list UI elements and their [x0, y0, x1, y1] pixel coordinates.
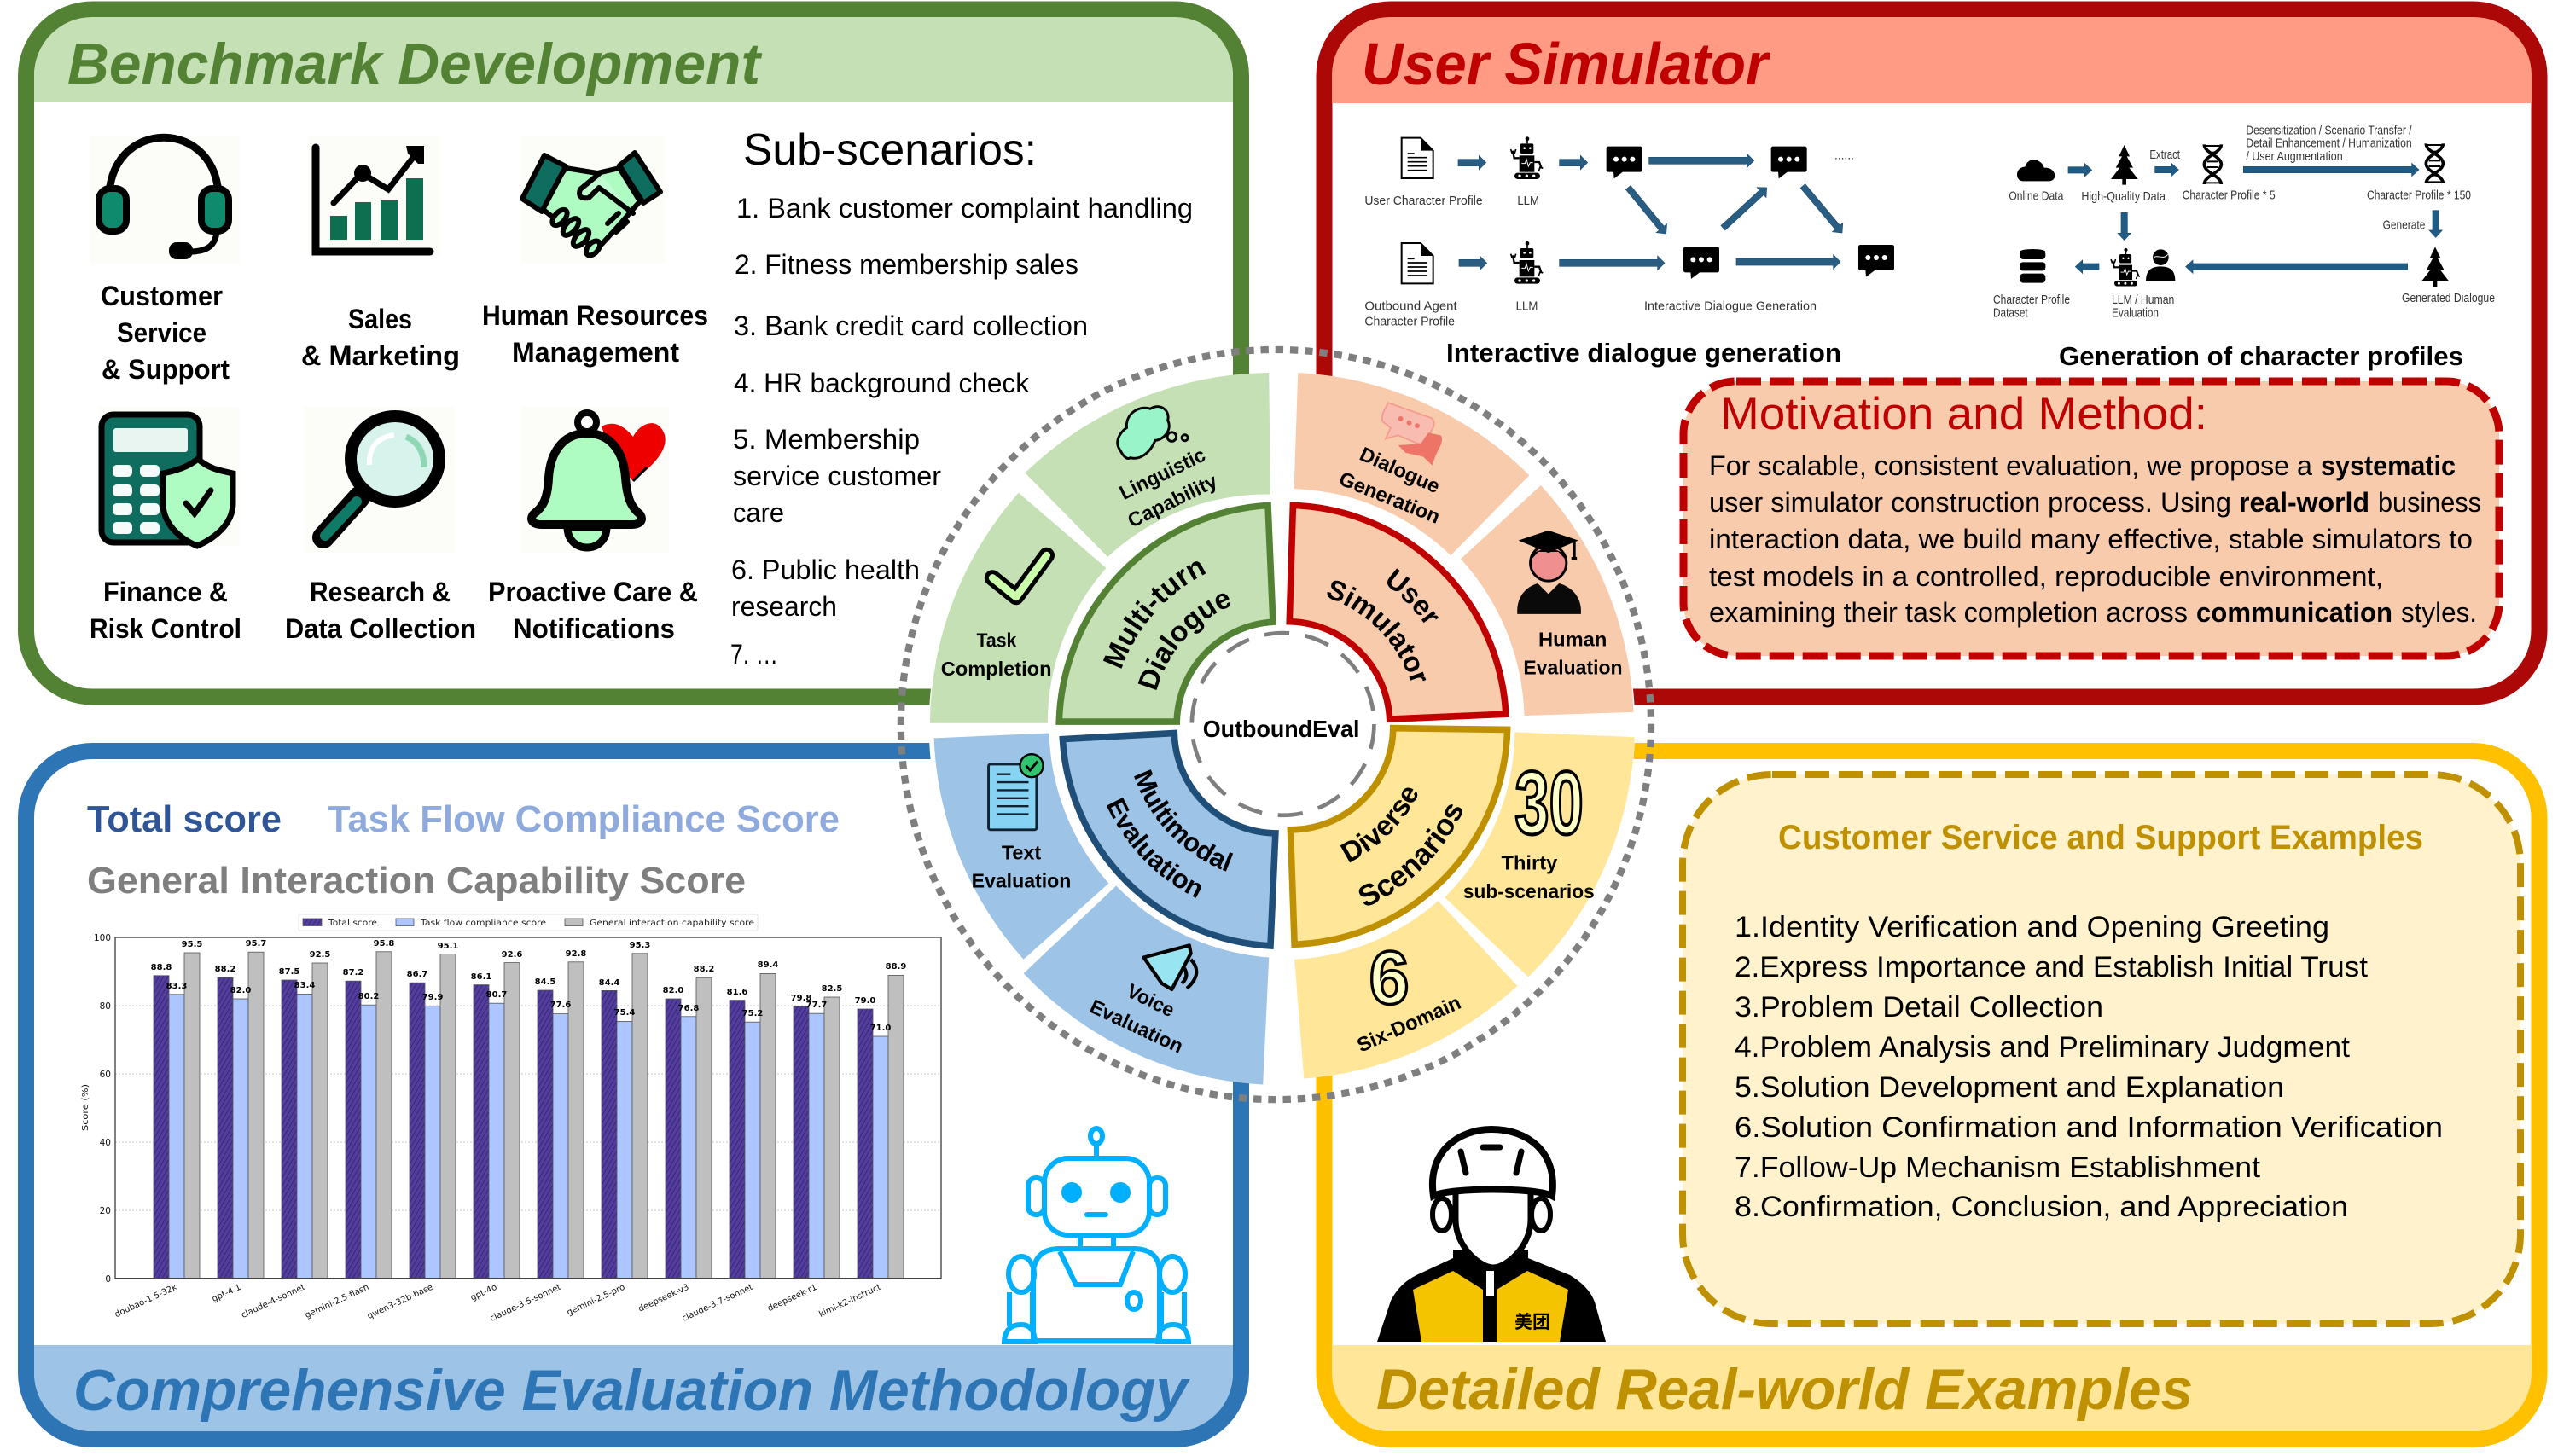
label: proactive care and notifications: Proactive Care & [488, 577, 698, 607]
diagram labels: Generate [2383, 219, 2425, 233]
label [941, 629, 1052, 680]
icon: generated tree [2421, 247, 2449, 287]
panel: benchmark development [26, 9, 1241, 697]
label: Six-Domain [1353, 991, 1464, 1057]
number 6: 6 [1369, 935, 1410, 1019]
bars and value labels by model: 80.7 [486, 990, 507, 1000]
sector: diverse scenarios [1287, 725, 1510, 948]
panel: user simulator [1324, 9, 2539, 697]
x axis model names: gemini-2.5-flash [304, 1283, 370, 1320]
icon: bell with heart [532, 413, 666, 548]
outer dotted ring [901, 350, 1651, 1099]
panel: comprehensive evaluation methodology [26, 751, 1241, 1440]
motivation body text: real-world [2239, 487, 2369, 518]
label: Completion [941, 658, 1052, 680]
bars and value labels by model: 95.3 [630, 941, 650, 950]
examples list: 2.Express Importance and Establish Initial Trust [1735, 951, 2369, 983]
x axis model names: gpt-4.1 [211, 1283, 242, 1304]
x axis model names [113, 1283, 882, 1324]
wedge: text evaluation [934, 734, 1108, 960]
label: finance and risk control: Finance & [103, 577, 228, 607]
motivation body text: user simulator construction process. Using [1709, 487, 2231, 518]
bar chart [81, 914, 941, 1324]
examples list: 1.Identity Verification and Opening Greeting [1735, 911, 2329, 943]
examples list: 6.Solution Confirmation and Information Verification [1735, 1111, 2443, 1144]
bars and value labels by model: 95.7 [246, 939, 266, 948]
diagram labels: Dataset [1993, 306, 2028, 320]
label: human resources management [482, 300, 708, 368]
icon: human evaluator [2146, 249, 2175, 281]
examples heading: Customer Service and Support Examples [1778, 819, 2423, 856]
bars and value labels by model: 75.4 [614, 1008, 635, 1018]
arrows: dialogue flow [1458, 154, 1847, 270]
chart legend: General interaction capability score [590, 919, 754, 928]
callout: motivation and method [1683, 381, 2499, 656]
heading: detailed real-world examples: Detailed Real-world Examples [1376, 1357, 2193, 1422]
icon: dna expanded [2426, 143, 2443, 183]
icon: speech bubbles [1382, 403, 1442, 466]
diagram labels: Character Profile * 5 [2183, 189, 2276, 203]
wedge: dialogue generation [1294, 373, 1529, 555]
icon: agent profile document [1402, 243, 1433, 283]
label: sales and marketing: Sales [348, 304, 412, 334]
label: finance and risk control [90, 577, 241, 644]
label: sales and marketing [301, 304, 460, 371]
y axis ticks: 0 [105, 1274, 111, 1285]
chart title: total score: Total score [87, 798, 282, 840]
bars and value labels by model: 81.6 [727, 988, 747, 997]
label: customer service and support: & Support [102, 354, 230, 385]
sub-scenarios list: 3. Bank credit card collection [734, 310, 1088, 341]
diagram labels: Character Profile [1993, 293, 2070, 307]
bars and value labels by model: 92.6 [502, 950, 522, 960]
chart title: task flow compliance score: Task Flow Compliance Score [328, 798, 840, 840]
label: Evaluation [972, 869, 1071, 891]
label: research and data collection [285, 577, 476, 644]
y axis ticks [94, 933, 111, 1285]
evaluation footer band [34, 1345, 1233, 1431]
heading: benchmark development: Benchmark Development [67, 32, 762, 96]
motivation heading: Motivation and Method: [1720, 389, 2207, 439]
wedge: six-domain [1294, 901, 1517, 1078]
label: Evaluation [1523, 656, 1623, 678]
sub-scenarios list [730, 125, 1193, 670]
icon: LLM robot lower [1511, 241, 1543, 284]
diagram labels: LLM [1516, 299, 1538, 313]
sub-scenarios list: 5. Membership [733, 424, 920, 455]
bars and value labels by model: 84.4 [599, 978, 619, 988]
x axis model names: gemini-2.5-pro [566, 1283, 626, 1318]
label: Task [976, 629, 1017, 652]
bars and value labels by model: 83.4 [294, 981, 315, 990]
diagram labels: LLM / Human [2112, 293, 2174, 307]
y axis ticks: 20 [100, 1206, 111, 1216]
label: Linguistic [1116, 444, 1209, 504]
benchmark header band [34, 17, 1233, 102]
icon: chat bubble three [1683, 247, 1719, 279]
label: Evaluation [1086, 995, 1187, 1058]
diagram labels: User Character Profile [1364, 194, 1483, 208]
icon: magnifier [323, 416, 439, 537]
bars and value labels by model: 77.6 [550, 1001, 571, 1010]
icon: LLM evaluator robot [2111, 248, 2140, 287]
x axis model names: claude-3.7-sonnet [681, 1283, 754, 1324]
label: Dialogue [1357, 443, 1444, 497]
label: human resources management: Management [512, 337, 679, 368]
icon: check mark [992, 555, 1047, 597]
bars and value labels by model: 87.5 [279, 967, 299, 977]
bars and value labels by model: 75.2 [742, 1009, 763, 1018]
label: customer service and support [101, 281, 230, 385]
logo text: 美团 [1514, 1313, 1550, 1332]
label: human resources management: Human Resources [482, 300, 708, 331]
label: Diverse [1340, 788, 1418, 863]
bars and value labels by model: 77.7 [806, 1001, 827, 1010]
chart legend [299, 914, 758, 931]
icon: chat bubble two [1771, 147, 1807, 178]
sub-scenarios list: 6. Public health [731, 554, 920, 585]
x axis model names: gpt-4o [469, 1283, 498, 1303]
ellipsis: ...... [1834, 149, 1854, 162]
examples list [1735, 911, 2443, 1223]
label: finance and risk control: Risk Control [90, 613, 241, 644]
bars and value labels by model: 86.1 [471, 972, 491, 982]
icon: handshake [522, 153, 660, 258]
diagram labels: / User Augmentation [2246, 150, 2343, 164]
diagram labels: High-Quality Data [2081, 190, 2166, 204]
motivation body text: systematic [2321, 450, 2456, 481]
y axis ticks: 80 [100, 1001, 111, 1012]
bars and value labels by model: 79.0 [855, 996, 875, 1006]
bars and value labels by model: 79.8 [791, 994, 811, 1003]
examples list: 4.Problem Analysis and Preliminary Judgment [1735, 1031, 2351, 1064]
sub-scenarios list: 7. … [730, 639, 778, 670]
label: research and data collection: Data Collection [285, 613, 476, 644]
icon: speaker [1143, 945, 1196, 989]
label: Multimodal [1134, 769, 1234, 872]
label: Text [1002, 841, 1041, 863]
icon: calculator and shield [102, 415, 233, 546]
motivation body text: test models in a controlled, reproducible environment, [1709, 561, 2383, 592]
motivation body text: communication [2196, 597, 2392, 628]
number 30: 30 [1514, 753, 1584, 853]
bars and value labels by model: 87.2 [343, 968, 363, 977]
label [972, 841, 1071, 891]
panel: detailed real-world examples [1324, 751, 2539, 1440]
label: scenarios arc: Scenarios [1358, 804, 1462, 906]
icon: dna [2204, 144, 2221, 184]
diagram labels: Outbound Agent [1364, 299, 1457, 313]
bars and value labels by model: 88.2 [215, 965, 235, 974]
center label: OutboundEval: OutboundEval [1203, 716, 1359, 742]
icon: database [2020, 249, 2045, 283]
label: Voice [1124, 979, 1178, 1021]
diagram labels: Extract [2149, 148, 2180, 162]
diagram labels: Desensitization / Scenario Transfer / [2246, 124, 2412, 137]
label: Thirty [1502, 852, 1557, 874]
heading: user simulator: User Simulator [1362, 31, 1771, 97]
sub-scenarios list: 1. Bank customer complaint handling [736, 193, 1193, 223]
caption: generation of character profiles: Generation of character profiles [2059, 341, 2463, 371]
label: dialogue arc: Dialogue [1138, 594, 1230, 690]
wedge: linguistic capability [1025, 373, 1270, 557]
x axis model names: deepseek-r1 [766, 1283, 818, 1314]
sub-scenarios list: care [733, 497, 784, 528]
bars and value labels by model: 82.0 [230, 986, 251, 995]
diagram labels: Character Profile [1364, 316, 1455, 329]
caption: interactive dialogue generation: Interactive dialogue generation [1446, 338, 1841, 368]
icon: checked document [989, 754, 1044, 830]
label: proactive care and notifications: Notifications [513, 613, 675, 644]
diagram labels: Generated Dialogue [2402, 292, 2495, 305]
x axis model names: deepseek-v3 [637, 1283, 690, 1314]
x axis model names: doubao-1.5-32k [113, 1283, 178, 1320]
bars and value labels by model: 84.5 [535, 977, 555, 987]
bars and value labels by model: 95.1 [438, 942, 458, 951]
icon: headset [99, 137, 229, 259]
chart legend: Task flow compliance score [420, 919, 546, 928]
bars and value labels by model [151, 939, 906, 1279]
sub-scenarios list: 4. HR background check [734, 368, 1030, 398]
label: User [1387, 568, 1439, 623]
diagram labels: Online Data [2009, 189, 2063, 203]
bars and value labels by model: 89.4 [758, 960, 778, 970]
sub-scenarios list: Sub-scenarios: [743, 125, 1037, 175]
bars and value labels by model: 79.9 [422, 993, 443, 1002]
label: sub-scenarios [1463, 880, 1595, 902]
icon: blue robot [1003, 1128, 1190, 1342]
icon: user profile document [1402, 138, 1433, 178]
chart legend: Total score [328, 919, 377, 928]
label: customer service and support: Customer [101, 281, 223, 311]
icon: thought cloud [1118, 407, 1188, 459]
wedge: thirty sub-scenarios [1445, 732, 1635, 977]
faint icon tiles [90, 136, 669, 553]
motivation body text: business [2378, 487, 2481, 518]
motivation body text [1709, 450, 2481, 628]
diagram: interactive dialogue generation [1364, 136, 1894, 329]
center wheel [898, 346, 1655, 1104]
label: Capability [1124, 470, 1221, 532]
bars and value labels by model: 71.0 [870, 1024, 891, 1033]
diagram labels: LLM [1517, 194, 1539, 208]
sub-scenarios list: research [731, 591, 837, 622]
y axis title: Score (%) [81, 1084, 90, 1131]
bars and value labels by model: 88.8 [151, 963, 172, 972]
icon: delivery rider [1377, 1129, 1606, 1342]
motivation body text: For scalable, consistent evaluation, we propose a [1709, 450, 2312, 481]
icon: growth chart [316, 146, 430, 252]
examples list: 3.Problem Detail Collection [1735, 991, 2103, 1024]
bars and value labels by model: 92.5 [310, 950, 330, 960]
motivation body text: interaction data, we build many effective, stable simulators to [1709, 524, 2473, 554]
icon: cloud [2017, 160, 2055, 181]
bars and value labels by model: 80.2 [358, 992, 379, 1001]
motivation body text: examining their task completion across [1709, 597, 2188, 628]
y axis ticks: 40 [100, 1138, 111, 1148]
bars and value labels by model: 95.5 [182, 940, 202, 949]
bars and value labels by model: 82.5 [822, 984, 842, 994]
arrows: profile flow [2068, 163, 2442, 273]
sub-scenarios list: service customer [733, 461, 941, 491]
diagram labels: Interactive Dialogue Generation [1644, 299, 1817, 313]
label: Generation [1336, 467, 1444, 528]
icon: chat bubble four [1858, 245, 1894, 277]
sub-scenarios list: 2. Fitness membership sales [735, 249, 1078, 280]
sector: multimodal evaluation [1059, 730, 1279, 949]
diagram labels: Character Profile * 150 [2367, 189, 2471, 203]
y axis ticks: 100 [94, 933, 111, 943]
chart title: general interaction capability score: General Interaction Capability Score [87, 860, 746, 902]
label: proactive care and notifications [488, 577, 698, 644]
bars and value labels by model: 88.2 [694, 965, 714, 974]
diagram: character profile generation [1993, 124, 2495, 320]
wedge: human evaluation [1461, 485, 1633, 716]
examples list: 5.Solution Development and Explanation [1735, 1071, 2284, 1104]
sector: multi-turn dialogue [1055, 502, 1276, 725]
bars and value labels by model: 76.8 [678, 1004, 699, 1013]
icon: chat bubble one [1607, 147, 1642, 178]
bars and value labels by model: 83.3 [166, 982, 187, 991]
label [1463, 852, 1595, 902]
bars and value labels by model: 86.7 [407, 970, 427, 979]
label: evaluation arc: Evaluation [1107, 798, 1201, 898]
label [1523, 628, 1623, 678]
label: Multi-turn [1102, 561, 1206, 669]
examples list: 8.Confirmation, Conclusion, and Appreciation [1735, 1191, 2348, 1223]
user simulator header band [1332, 17, 2532, 103]
label: customer service and support: Service [117, 317, 206, 348]
diagram labels [1993, 124, 2495, 320]
icon: LLM robot [1511, 136, 1543, 179]
bars and value labels by model: 88.9 [886, 962, 906, 972]
y axis ticks: 60 [100, 1070, 111, 1080]
diagram labels: Evaluation [2112, 306, 2159, 320]
wedge: voice evaluation [1024, 886, 1269, 1085]
center dashed circle [1192, 633, 1374, 815]
examples footer band [1332, 1345, 2532, 1431]
callout: customer service examples [1683, 774, 2520, 1324]
label [1116, 444, 1221, 532]
examples list: 7.Follow-Up Mechanism Establishment [1735, 1151, 2261, 1184]
label: research and data collection: Research & [310, 577, 451, 607]
label: sales and marketing: & Marketing [301, 340, 460, 371]
bars and value labels by model: 92.8 [566, 949, 586, 959]
bars and value labels by model: 95.8 [374, 939, 394, 948]
motivation body text: styles. [2401, 597, 2477, 628]
label: simulator arc: Simulator [1328, 580, 1427, 681]
sector: user simulator [1286, 502, 1509, 722]
label: Human [1538, 628, 1607, 650]
x axis model names: claude-4-sonnet [240, 1283, 306, 1320]
icon: tree [2111, 145, 2138, 185]
wedge: task completion [930, 493, 1106, 723]
diagram labels [1364, 194, 1817, 329]
x axis model names: qwen3-32b-base [366, 1283, 434, 1321]
icon: graduate [1517, 531, 1581, 614]
x axis model names: kimi-k2-instruct [817, 1283, 882, 1320]
diagram labels: Detail Enhancement / Humanization [2246, 137, 2412, 151]
x axis model names: claude-3.5-sonnet [489, 1283, 562, 1324]
heading: comprehensive evaluation methodology: Comprehensive Evaluation Methodology [73, 1358, 1190, 1423]
bars and value labels by model: 82.0 [663, 986, 683, 995]
